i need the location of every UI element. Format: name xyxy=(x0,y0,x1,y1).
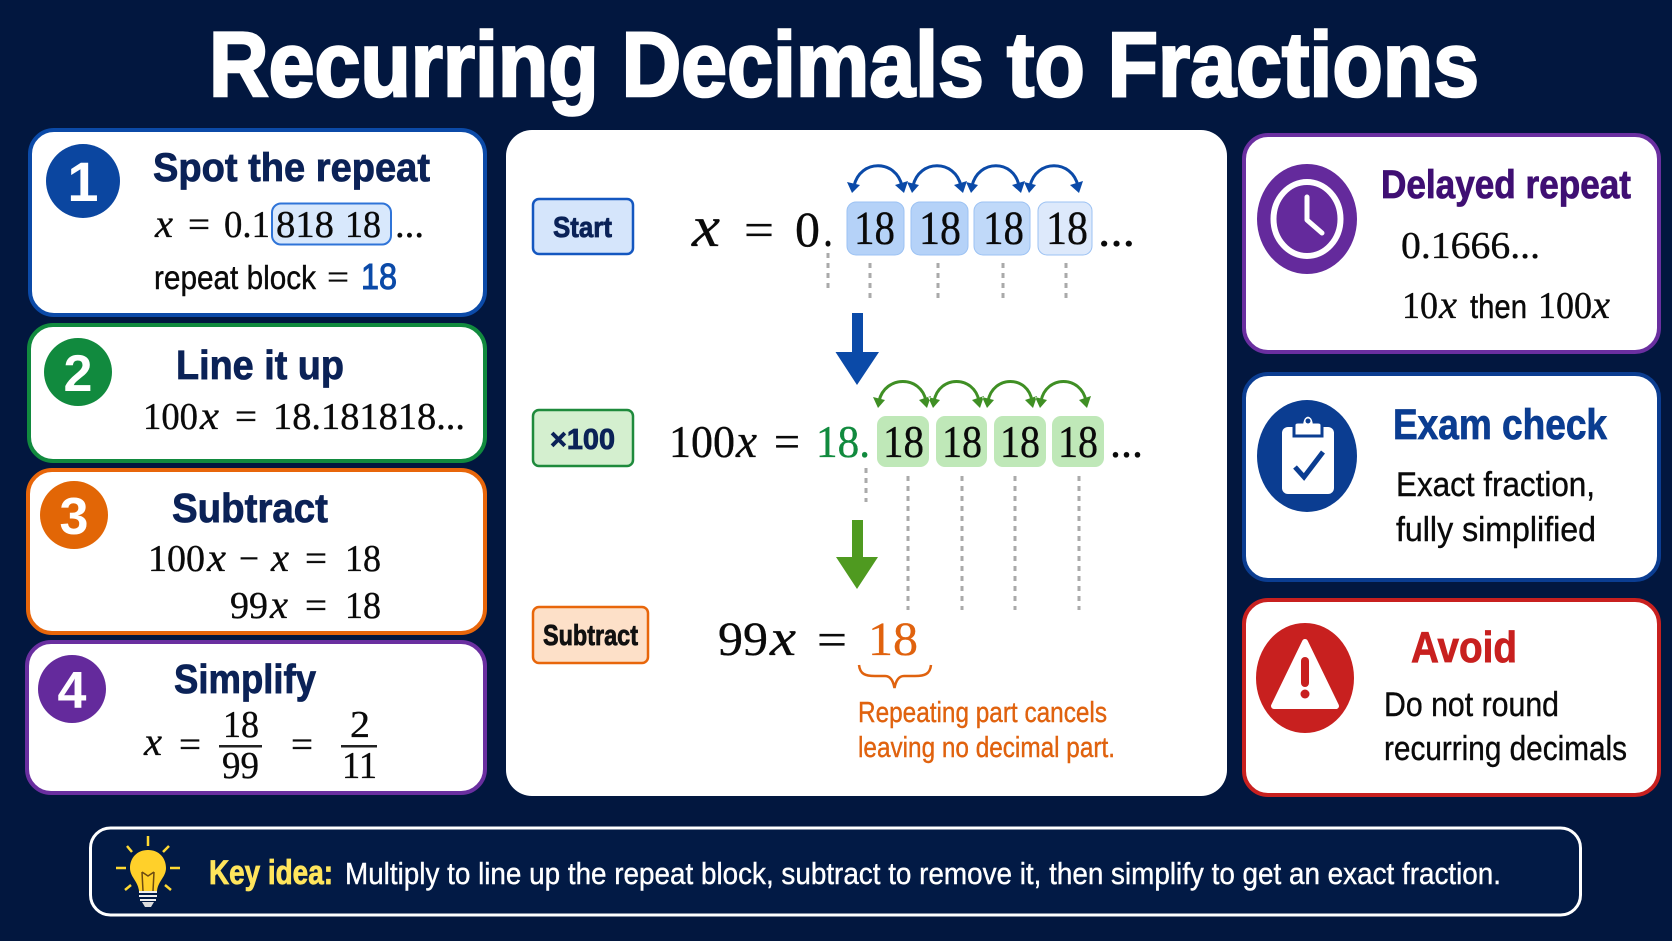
text: 10x then 100x xyxy=(1402,282,1610,327)
equation: x = 0.18181818: 0 xyxy=(795,201,820,257)
equation: x = 18/99 = 2/11 xyxy=(143,704,377,787)
equation: x = 0.18181818: 18 xyxy=(983,202,1024,255)
text: exact fraction fully simplified: Exact fraction, xyxy=(1396,466,1595,504)
heading: avoid: Avoid xyxy=(1411,623,1517,672)
annotation: repeating part cancels: Repeating part cancels xyxy=(858,697,1107,729)
equation: 100x = 18.18181818: 100 xyxy=(669,416,735,467)
text: 0.1666: 0.1666... xyxy=(1401,225,1540,267)
equation: x = 0.18181818: = xyxy=(744,204,774,257)
equation: x = 18/99 = 2/11: 2 xyxy=(350,704,370,746)
heading: subtract: Subtract xyxy=(172,485,328,531)
text: repeat block = 18: 18 xyxy=(361,256,397,297)
equation: x = 18/99 = 2/11: x xyxy=(143,719,162,764)
arrows: blue repeat arcs xyxy=(847,166,1083,193)
heading: spot the repeat: Spot the repeat xyxy=(153,146,430,190)
equation: 99x = 18: 18 xyxy=(868,613,918,666)
heading: exam check: Exam check xyxy=(1393,401,1607,449)
equation: x = 0.18181818: . xyxy=(823,204,833,257)
equation: 100x = 18.18181818: 18 xyxy=(942,416,982,467)
equation: x = 0.181818: 818 xyxy=(276,204,334,246)
label: x100 xyxy=(533,410,633,466)
heading: simplify: Simplify xyxy=(174,656,316,702)
icon: light bulb xyxy=(116,836,180,907)
arrow: blue down xyxy=(836,313,879,385)
equation: x = 0.181818: x xyxy=(154,201,173,246)
equation: x = 0.18181818: ... xyxy=(1098,204,1135,257)
annotation: repeating part cancels: leaving no decimal part. xyxy=(858,732,1115,764)
equation: x = 0.18181818: 18 xyxy=(1046,202,1088,255)
icon: number 4: 4 xyxy=(58,662,87,720)
equation: 100x - x = 18: − xyxy=(239,538,259,580)
arrow: green down xyxy=(836,520,878,589)
equation: 100x = 18.181818: 18.181818... xyxy=(273,396,465,438)
equation: x = 0.18181818: x xyxy=(691,194,720,259)
equation: 99x = 18: = xyxy=(817,614,847,665)
equation: x = 0.181818: 0.1 xyxy=(224,204,270,246)
equation: 100x = 18.181818: x xyxy=(199,393,219,438)
equation: 100x = 18.181818 xyxy=(143,393,465,438)
title: Recurring Decimals to Fractions xyxy=(209,14,1479,116)
brace xyxy=(859,665,931,688)
text: do not round recurring decimals xyxy=(1384,686,1627,768)
text: exact fraction fully simplified xyxy=(1396,466,1596,549)
equation: 100x - x = 18: x xyxy=(206,535,226,580)
text: do not round recurring decimals: Do not round xyxy=(1384,686,1559,724)
text: 10x then 100x: x xyxy=(1438,282,1457,327)
icon: number 1: 1 xyxy=(67,150,99,213)
callout: key idea bar xyxy=(90,828,1580,915)
label: start xyxy=(533,199,633,254)
dotted guides row 2 xyxy=(866,468,1079,610)
equation: 100x = 18.181818: = xyxy=(235,396,257,438)
panel: step 3 subtract xyxy=(28,470,485,633)
label: start: Start xyxy=(553,212,612,244)
panel: exam check xyxy=(1244,374,1659,580)
equation: 100x = 18.18181818: ... xyxy=(1110,416,1143,467)
text: key idea: Key idea: xyxy=(209,854,333,892)
equation: x = 0.18181818 xyxy=(691,194,1135,259)
heading: delayed repeat: Delayed repeat xyxy=(1381,163,1631,207)
icon: warning xyxy=(1256,623,1354,733)
text: 10x then 100x: 10 xyxy=(1402,285,1438,327)
text: repeat block = 18: = xyxy=(327,257,349,297)
equation: 99x = 18 xyxy=(718,610,918,667)
text: 10x then 100x: x xyxy=(1591,282,1610,327)
label: x100: ×100 xyxy=(550,424,615,456)
equation: x = 0.181818: 18 xyxy=(345,204,381,246)
equation: 100x = 18.18181818: 18 xyxy=(883,416,924,467)
equation: 99x = 18: x xyxy=(769,610,796,667)
equation: 99x = 18: 99 xyxy=(230,585,268,627)
equation: x = 18/99 = 2/11: 18 xyxy=(223,704,259,746)
panel: avoid xyxy=(1244,600,1659,795)
icon: number 3 xyxy=(40,481,108,549)
text: exact fraction fully simplified: fully simplified xyxy=(1396,511,1596,549)
equation: 100x - x = 18: = xyxy=(305,538,327,580)
equation: x = 18/99 = 2/11: = xyxy=(291,724,313,766)
icon: number 3: 3 xyxy=(60,488,88,546)
equation: 100x - x = 18 xyxy=(148,535,381,580)
icon: clipboard xyxy=(1257,400,1357,512)
equation: x = 18/99 = 2/11: = xyxy=(179,724,201,766)
equation: x = 0.181818: ... xyxy=(395,204,424,246)
panel: central worked example xyxy=(506,130,1227,796)
equation: x = 18/99 = 2/11: 11 xyxy=(342,745,377,787)
icon: number 2 xyxy=(44,338,112,406)
equation: 100x = 18.18181818: x xyxy=(735,415,757,468)
text: 10x then 100x: then xyxy=(1470,288,1527,325)
equation: 100x = 18.18181818: 18. xyxy=(816,416,870,467)
equation: 99x = 18: 18 xyxy=(345,585,381,627)
equation: 100x - x = 18: 100 xyxy=(148,538,205,580)
equation: 99x = 18: 99 xyxy=(718,613,768,666)
panel: step 1 spot the repeat xyxy=(30,130,485,315)
equation: 100x = 18.181818: 100 xyxy=(143,396,198,438)
equation: x = 0.181818: = xyxy=(188,204,210,246)
dotted guides row 1 xyxy=(828,253,1066,300)
heading: line it up: Line it up xyxy=(176,342,344,388)
text: repeat block = 18 xyxy=(154,256,397,297)
equation: 100x = 18.18181818 xyxy=(669,415,1143,468)
label: subtract xyxy=(533,607,648,663)
equation: 100x - x = 18: x xyxy=(270,535,289,580)
text: repeat block = 18: repeat block xyxy=(154,259,316,296)
equation: x = 18/99 = 2/11: 99 xyxy=(222,745,259,787)
icon: clock xyxy=(1257,164,1357,274)
text: key idea body: Multiply to line up the repeat block, subtract to remove it, then simplify to get an exact fraction. xyxy=(345,856,1501,891)
panel: step 2 line it up xyxy=(29,325,485,461)
label: subtract: Subtract xyxy=(543,620,638,652)
panel: step 4 simplify xyxy=(27,642,485,793)
text: 10x then 100x: 100 xyxy=(1538,285,1592,327)
panel: delayed repeat xyxy=(1244,135,1659,352)
arrows: green repeat arcs xyxy=(873,382,1091,408)
equation: 100x = 18.18181818: 18 xyxy=(1000,416,1040,467)
equation: 99x = 18: x xyxy=(269,582,288,627)
equation: x = 0.18181818: 18 xyxy=(919,202,961,255)
equation: 100x - x = 18: 18 xyxy=(345,538,381,580)
equation: 99x = 18: = xyxy=(305,585,327,627)
text: do not round recurring decimals: recurring decimals xyxy=(1384,730,1627,768)
annotation: repeating part cancels xyxy=(858,697,1115,764)
equation: 99x = 18 xyxy=(230,582,381,627)
equation: 100x = 18.18181818: = xyxy=(774,416,800,467)
equation: x = 0.18181818: 18 xyxy=(854,202,895,255)
icon: number 1 xyxy=(46,144,120,218)
icon: number 4 xyxy=(38,655,106,723)
equation: 100x = 18.18181818: 18 xyxy=(1058,416,1098,467)
icon: number 2: 2 xyxy=(64,345,92,403)
equation: x = 0.181818 xyxy=(154,201,424,246)
